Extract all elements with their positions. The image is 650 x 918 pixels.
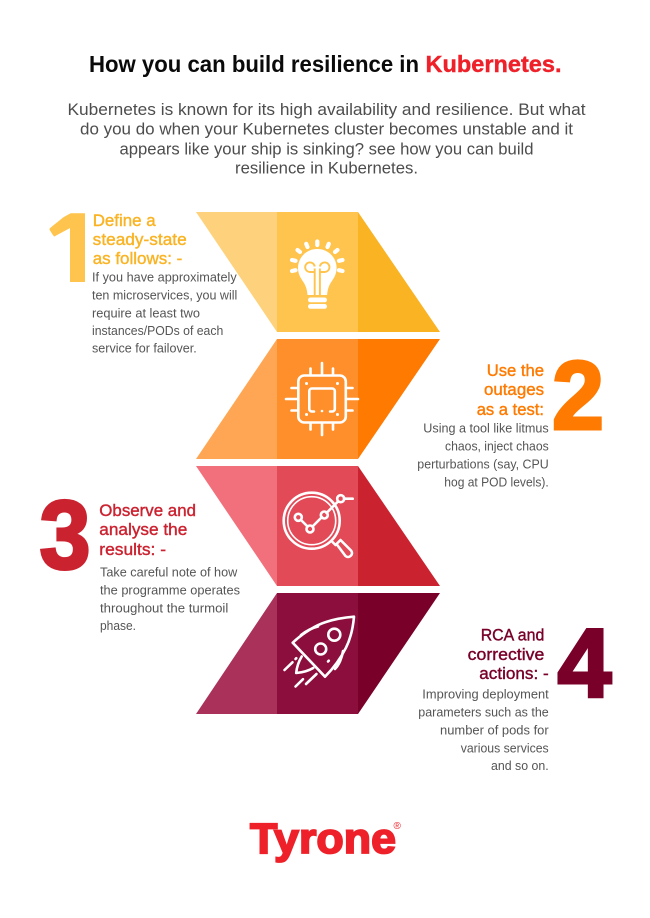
step 2: body: Using a tool like litmus	[423, 422, 549, 436]
step 1: heading: Define a	[93, 211, 156, 230]
step 3: body: throughout the turmoil	[100, 601, 228, 615]
step 3: body	[100, 566, 240, 633]
step 2: heading	[477, 361, 544, 419]
chevron panel 4: maroon	[196, 593, 440, 714]
step 4: number: 4	[558, 608, 612, 718]
step 3: heading: results: -	[99, 540, 166, 559]
intro text: appears like your ship is sinking? see how you can build	[120, 140, 534, 158]
step 1: heading: steady-state	[93, 230, 187, 249]
intro text	[68, 100, 586, 178]
logo: Tyrone: Tyrone	[250, 815, 396, 863]
step 4: body: and so on.	[491, 759, 549, 773]
step 3: body: phase.	[100, 619, 136, 633]
step 1: body	[92, 271, 237, 356]
icon: light bulb	[292, 242, 342, 309]
step 3: body: the programme operates	[100, 583, 240, 597]
step 1: body: ten microservices, you will	[92, 288, 237, 302]
step 3: body: Take careful note of how	[100, 566, 238, 580]
step 3: number: 3	[40, 480, 90, 590]
icon: magnifier with trend line	[284, 493, 353, 557]
step 4: heading	[468, 626, 549, 683]
step 2: number: 2	[552, 341, 604, 450]
step 2: heading: Use the	[487, 361, 544, 380]
intro text: Kubernetes is known for its high availability and resilience. But what	[68, 100, 586, 119]
step 2: body: hog at POD levels).	[444, 476, 549, 490]
step 4: heading: actions: -	[479, 664, 549, 683]
step 1: body: If you have approximately	[92, 271, 237, 285]
step 1: heading	[93, 211, 187, 268]
step 4: heading: corrective	[468, 645, 544, 664]
step 3: heading: Observe and	[99, 501, 196, 520]
step 4: body: Improving deployment	[422, 687, 549, 701]
step 4: body: number of pods for	[440, 723, 549, 737]
step 4: heading: RCA and	[481, 626, 544, 645]
icon: rocket	[284, 617, 354, 686]
step 1: body: instances/PODs of each	[92, 324, 223, 338]
step 4: body: parameters such as the	[418, 705, 549, 719]
step 4: body: various services	[461, 741, 549, 755]
step 2: heading: outages	[484, 380, 544, 399]
chevron panel 1: yellow	[196, 212, 440, 332]
step 1: body: service for failover.	[92, 342, 197, 356]
step 2: body: perturbations (say, CPU	[417, 458, 549, 472]
chevron panel 2: orange	[196, 339, 440, 459]
step 2: body	[417, 422, 549, 490]
step 3: heading: analyse the	[99, 520, 187, 539]
icon: microchip	[286, 363, 358, 435]
step 3: heading	[99, 501, 196, 559]
title: Kubernetes.	[426, 51, 562, 77]
step 4: body	[418, 687, 549, 773]
step 1: body: require at least two	[92, 306, 200, 320]
step 2: body: chaos, inject chaos	[445, 440, 549, 454]
logo: Tyrone: ®	[394, 821, 402, 832]
step 1: heading: as follows: -	[93, 249, 182, 268]
step 1: number: 1	[44, 194, 108, 303]
step 2: heading: as a test:	[477, 400, 544, 419]
chevron panel 3: red	[196, 466, 440, 586]
intro text: do you do when your Kubernetes cluster becomes unstable and it	[80, 120, 573, 138]
intro text: resilience in Kubernetes.	[235, 158, 418, 178]
title: How you can build resilience in	[89, 51, 419, 77]
